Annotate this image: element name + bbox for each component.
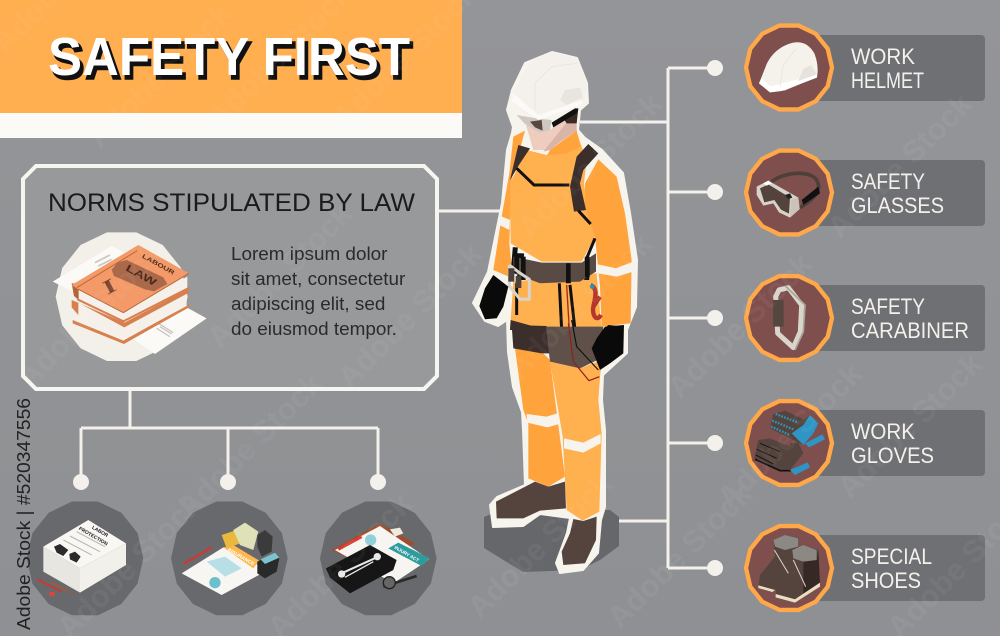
belt [513,253,596,283]
stock watermark: Adobe Stock [600,476,759,635]
body text: sit amet, consectetur [231,269,405,290]
item: special shoes [746,526,985,610]
label: GLASSES [851,193,944,218]
knee stripes [527,413,559,427]
label [851,419,934,468]
icon: labour law books: LABOUR [141,254,176,277]
icon: goggles [757,173,820,218]
lower book [73,304,189,344]
label [851,544,932,593]
connector lines [81,68,715,568]
label [851,294,969,343]
left boot [496,482,566,518]
stock watermark: Adobe Stock [200,196,359,355]
icon: labour law books: I [99,274,120,299]
stock watermark: Adobe Stock [820,86,979,245]
icon: carabiner [773,286,805,350]
hand and cord [592,325,624,370]
bottom icon: insurance documents: INSURANCE [226,547,256,568]
label: SHOES [851,568,921,593]
item: work gloves [746,401,985,485]
stock watermark: Adobe Stock [830,346,989,505]
item: work helmet [746,26,985,109]
figure outline [473,52,637,573]
law plate [112,260,167,291]
label [851,169,944,218]
title: SAFETY FIRST [48,27,410,87]
body text [231,244,405,340]
body text: adipiscing elit, sed [231,294,385,315]
body text: do eiusmod tempor. [231,319,397,340]
label: GLOVES [851,443,934,468]
label: HELMET [851,68,924,93]
figure: worker in safety gear [473,52,637,573]
label: SPECIAL [851,544,932,569]
icon: gloves [754,411,825,475]
stock watermark: Adobe Stock [660,246,819,405]
stock watermark: Adobe Stock [330,236,489,395]
reflective stripes [499,216,510,230]
stock watermark: Adobe Stock [510,86,669,245]
upper body [479,53,633,330]
upper book [78,277,187,321]
icon: boots [758,535,820,603]
black glove left [479,275,508,319]
item: safety carabiner [746,276,985,360]
panel: norms stipulated by law [23,166,437,389]
bottom icon: injury act with x-ray [320,501,437,615]
stock watermark: Adobe Stock [170,366,329,525]
label: WORK [851,419,915,444]
bottom icon: insurance documents [171,501,288,615]
head [526,110,577,150]
belt carabiner [509,265,529,299]
body text: Lorem ipsum dolor [231,244,387,265]
stock id text: Adobe Stock | #520347556 [14,398,34,630]
icon: helmet [759,42,818,92]
label: CARABINER [851,318,969,343]
stock watermark: Adobe Stock [500,226,659,385]
title: SAFETY FIRST [51,31,413,91]
bottom icon: labor protection documents [27,501,143,615]
label [851,44,924,93]
label: WORK [851,44,915,69]
banner [0,0,462,138]
bottom icon: labor protection documents: LABOR [91,525,109,539]
red hook [591,285,601,318]
stock watermark: Adobe Stock [80,0,239,155]
bottom icon: injury act with x-ray: INJURY ACT [393,545,420,563]
label: SAFETY [851,294,925,319]
bottom icon: labor protection documents: PROTECTION [77,526,109,548]
figure: worker base [484,510,619,572]
stock watermark: Adobe Stock [710,356,869,515]
helmet [512,53,587,115]
icon: labour law books [53,232,207,361]
label: SAFETY [851,169,925,194]
item: safety glasses [746,151,985,234]
lower body [496,320,624,565]
panel heading: NORMS STIPULATED BY LAW [48,189,415,217]
right boot [562,517,597,565]
goggles [517,115,552,133]
stock watermark: Adobe Stock [460,466,619,625]
icon: labour law books: LAW [124,263,159,289]
stock watermark: Adobe Stock [10,236,169,395]
harness straps [510,145,530,180]
